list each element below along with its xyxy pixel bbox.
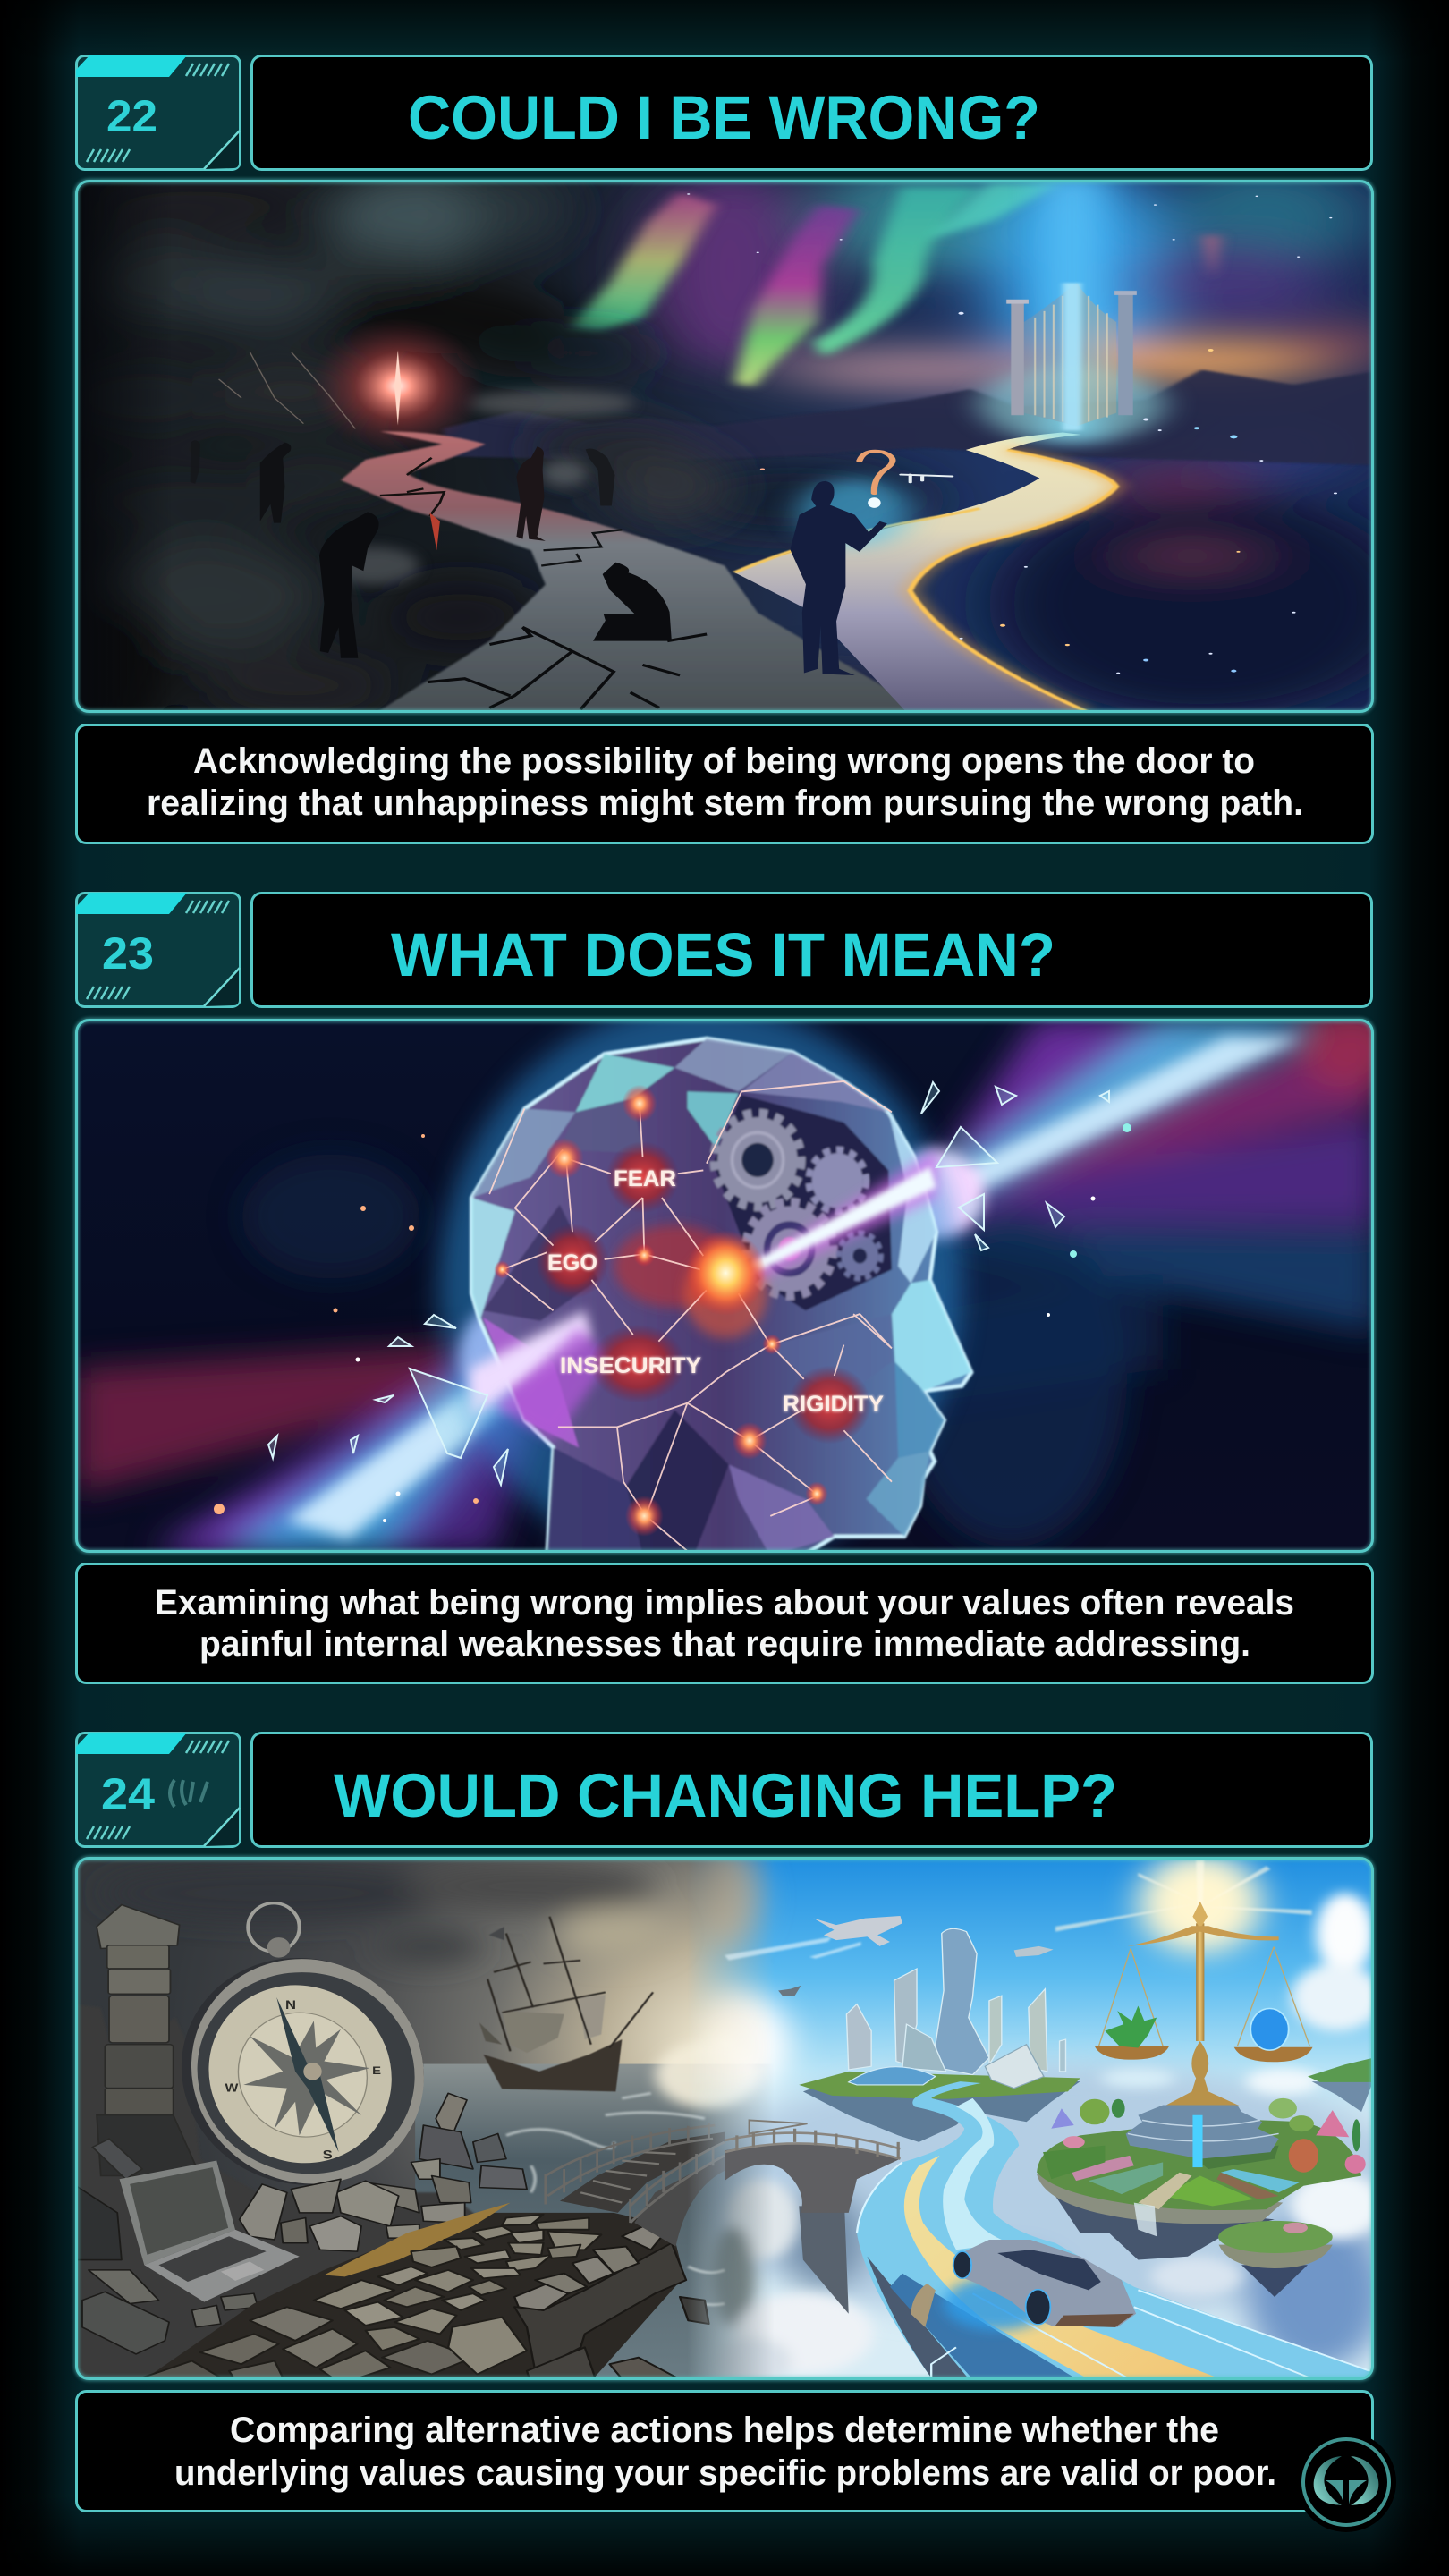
section 23: what does it mean (76, 893, 1404, 1683)
glowing road (734, 433, 1116, 711)
label: RIGIDITY: RIGIDITY (783, 1392, 884, 1417)
small floating island (1218, 2221, 1333, 2297)
title bar: could I be wrong: COULD I BE WRONG? (408, 83, 1040, 152)
silver sports car (944, 2240, 1136, 2331)
panel frame: crystal head (77, 1020, 1372, 1551)
futuristic towers (846, 1928, 1065, 2075)
panel: illustration of dark broken road and glowing path (78, 182, 1371, 710)
caption: section 24 (77, 2392, 1372, 2512)
badge: number 24: 24 (101, 1769, 155, 1819)
aircraft (724, 1916, 1054, 1996)
red neural regions (536, 1141, 871, 1445)
caption: section 22: Acknowledging the possibility of being wrong opens the door to (193, 741, 1255, 781)
network lines (489, 1081, 892, 1556)
logo badge (1296, 2432, 1396, 2532)
stone wall by the path (514, 2224, 708, 2384)
badge: number 23 (76, 893, 240, 1007)
lighter fog and cloud wisps (328, 390, 634, 584)
horizon hills (444, 369, 1372, 465)
beam through the head (470, 1149, 936, 1441)
panel frame: ruins and future (77, 1859, 1372, 2379)
aurora curtains (568, 183, 1222, 387)
dark vignette along the left edge (78, 182, 152, 624)
right side sky and ground colour washes (647, 162, 1414, 716)
gate with light beam (979, 179, 1165, 444)
gold balance scales (1095, 1902, 1313, 2106)
sailing ship (479, 1917, 653, 2091)
storm clouds (114, 182, 737, 709)
man in blue suit (790, 478, 911, 675)
sky with clouds (642, 1846, 1428, 2391)
compass: N (285, 1999, 296, 2012)
compass: E (372, 2064, 381, 2077)
panel: crystal head illustration (76, 1002, 1404, 1571)
title bar: what does it mean (252, 893, 1372, 1007)
panel: ruins and future illustration (76, 1846, 1428, 2394)
title bar: would changing help (252, 1733, 1372, 1846)
right half: bright sky and floating future world (642, 1846, 1428, 2391)
stone pillar (92, 1905, 200, 2179)
glass shards and sparks (268, 1082, 1109, 1485)
glowing question mark (860, 451, 952, 508)
laptop (120, 2161, 300, 2302)
crystal head (438, 1003, 971, 1571)
glowing nodes (494, 1085, 828, 1537)
caption: section 22 (77, 724, 1372, 843)
compass: W (225, 2082, 239, 2095)
caption: section 23 (77, 1563, 1372, 1683)
compass (164, 1903, 442, 2198)
title bar: would changing help: WOULD CHANGING HELP? (334, 1761, 1117, 1830)
compass rose (243, 2021, 369, 2135)
badge: number 22: 22 (106, 91, 157, 141)
gears (713, 1095, 892, 1310)
left half: storm, fog, cracked road and mourners (27, 169, 933, 743)
section 22: could I be wrong (27, 55, 1414, 843)
floating island with towers (799, 2045, 1080, 2142)
sun glare behind scales (1055, 1852, 1312, 1953)
caption: section 23: Examining what being wrong implies about your values often reveals (155, 1583, 1294, 1623)
section 24: would changing help (76, 1733, 1428, 2512)
storm clouds (101, 1863, 667, 1963)
caption: section 22: realizing that unhappiness might stem from pursuing the wrong path. (147, 784, 1303, 823)
title bar: could I be wrong (252, 55, 1372, 170)
label: INSECURITY: INSECURITY (560, 1353, 701, 1378)
crystal facets (471, 1038, 971, 1556)
light beams (76, 1002, 1404, 1552)
cracked road (341, 431, 933, 716)
right floating island (1308, 2058, 1373, 2112)
caption: section 23: painful internal weaknesses that require immediate addressing. (199, 1624, 1250, 1664)
bridge stairs and railing (546, 2123, 724, 2247)
left half: ruins, compass, ship and cobbles (76, 1856, 841, 2394)
bridge continuing to the clouds (724, 2120, 901, 2314)
badge: number 22 (76, 55, 240, 170)
red glow on the horizon (218, 324, 478, 449)
rubble (76, 2093, 527, 2354)
badge: number 24 (76, 1733, 240, 1846)
label: EGO: EGO (547, 1250, 597, 1275)
compass: S (323, 2148, 333, 2162)
badge: number 23: 23 (102, 928, 154, 979)
caption: section 24: underlying values causing your specific problems are valid or poor. (174, 2453, 1276, 2493)
sea (415, 2041, 841, 2387)
title bar: what does it mean: WHAT DOES IT MEAN? (391, 920, 1055, 989)
cobblestone path (138, 2123, 724, 2384)
silhouettes of mourning people (191, 440, 672, 658)
glowing road (857, 2081, 1373, 2384)
label: FEAR: FEAR (614, 1166, 676, 1191)
cliffs behind the ruins (76, 2004, 489, 2384)
caption: section 24: Comparing alternative actions helps determine whether the (230, 2411, 1219, 2450)
panel frame: illustration (77, 181, 1372, 712)
stars (687, 193, 1337, 674)
main floating garden island (1037, 2098, 1366, 2260)
